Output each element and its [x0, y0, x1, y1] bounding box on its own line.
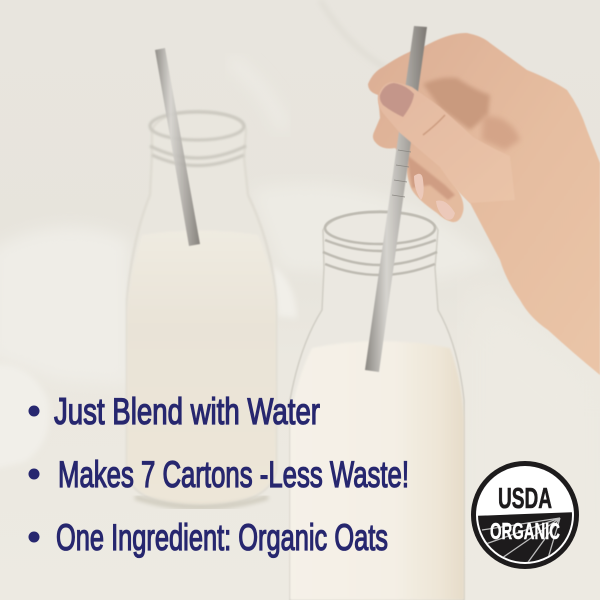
bullet: Just Blend with Water: [28, 391, 320, 432]
index finger underside shadow: [423, 78, 490, 130]
knuckle web shadow: [482, 115, 520, 150]
lower fingers shading: [407, 155, 455, 200]
metal straw: [365, 26, 427, 372]
fingers and palm: [368, 33, 600, 375]
hand holding metal straw: [365, 26, 600, 375]
thumb nail: [380, 83, 414, 117]
seal ORGANIC text: ORGANIC: [490, 518, 560, 544]
front milk bottle: [290, 211, 464, 600]
bullet list: [28, 391, 409, 558]
bullet: Makes 7 Cartons: [28, 454, 409, 495]
bullet: Makes 7 Cartons: Makes 7 Cartons -Less Waste!: [58, 454, 409, 495]
seal USDA text: USDA: [498, 483, 552, 515]
thumb knuckle crease: [423, 115, 445, 135]
USDA organic seal: [470, 461, 580, 569]
back bottle base shadow: [135, 497, 268, 508]
back bottle glass: [127, 111, 276, 506]
front bottle milk: [290, 341, 464, 600]
back milk bottle: [127, 48, 276, 508]
back bottle milk: [127, 230, 276, 505]
finger nails: [414, 174, 455, 220]
front bottle rim: [323, 212, 437, 275]
seal lower field: [478, 512, 572, 562]
front bottle glass: [290, 211, 464, 600]
back straw: [155, 48, 200, 246]
bullet: One Ingredient: [28, 517, 388, 558]
white cloth: [0, 184, 495, 470]
bullet: One Ingredient: One Ingredient: Organic Oats: [56, 517, 388, 558]
thumb: [378, 82, 515, 203]
back bottle rim: [150, 112, 246, 166]
bullet: Just Blend with Water: Just Blend with Water: [54, 391, 320, 432]
